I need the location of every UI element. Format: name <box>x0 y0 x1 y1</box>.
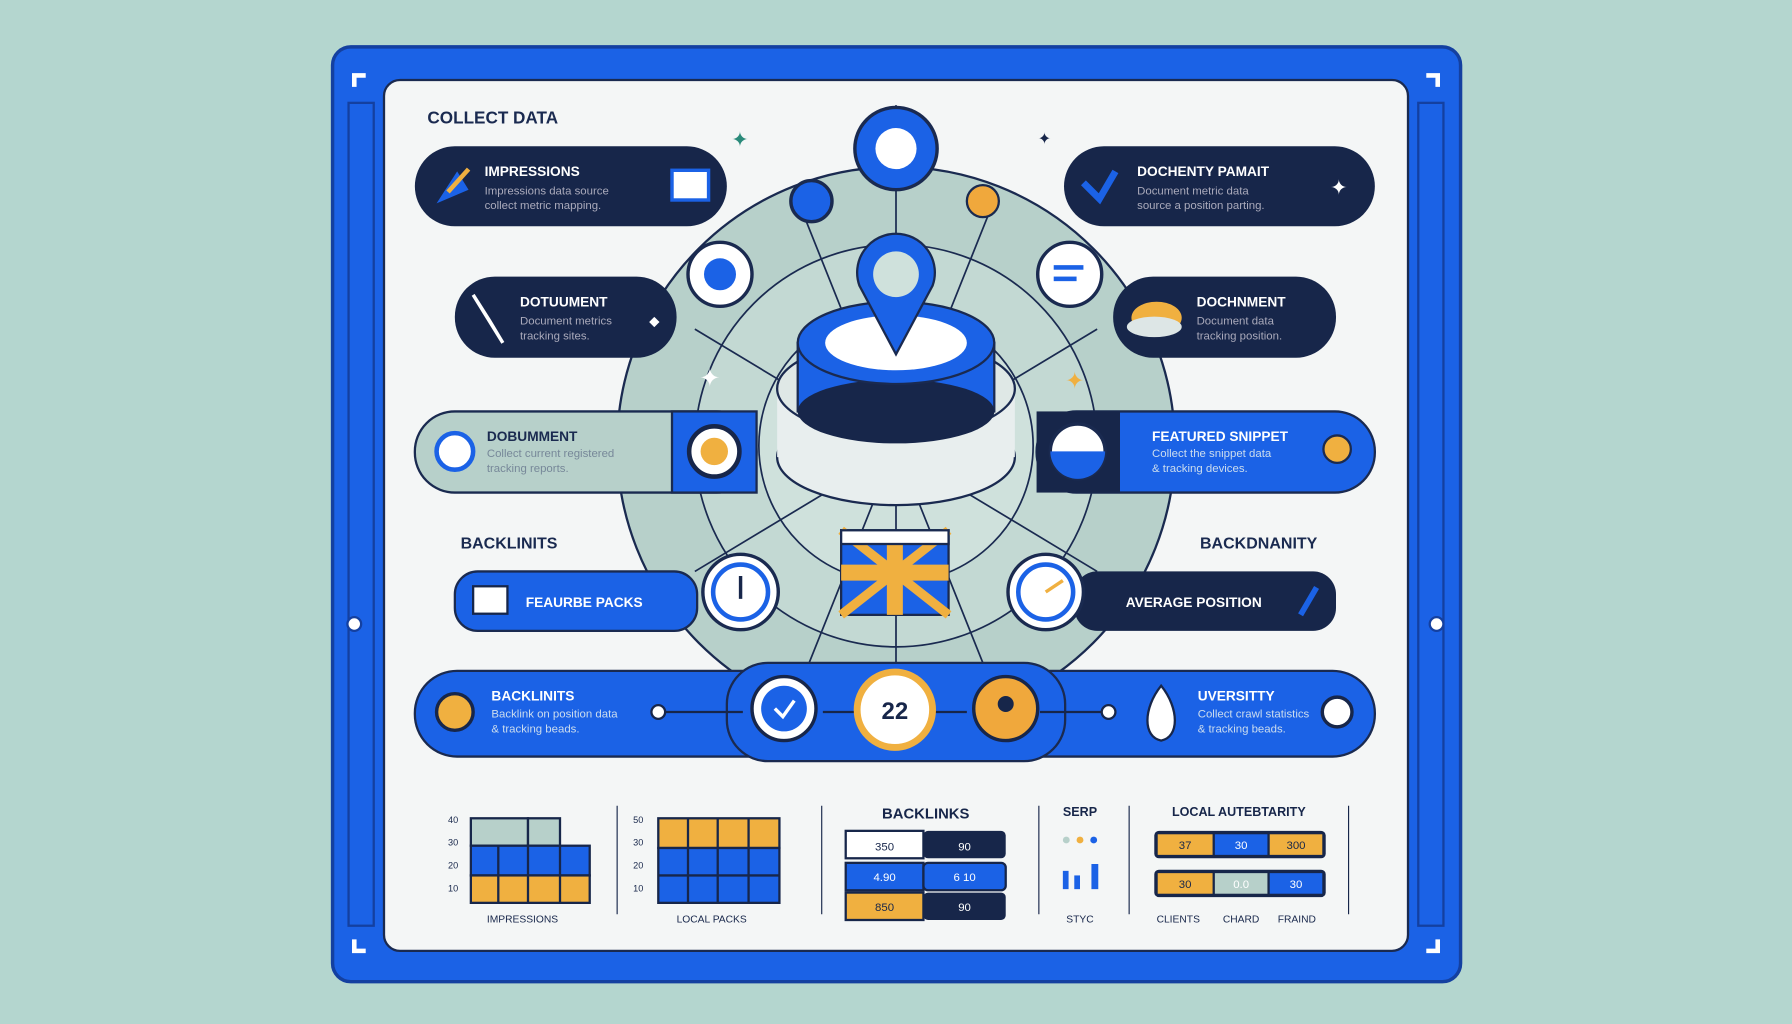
chart: local packs <box>633 815 779 925</box>
chart: local packs: 30 <box>633 838 643 848</box>
pill: featured snippet: & tracking devices. <box>1152 463 1248 475</box>
bottom bar: 22 <box>882 698 908 725</box>
chart: backlinks table <box>846 806 1006 920</box>
pill: document top right: ✦ <box>1330 176 1348 199</box>
pill: document top right: Document metric data <box>1137 185 1249 197</box>
chart: local authority: 30 <box>1179 879 1191 891</box>
pill: dochnment: Document data <box>1197 316 1275 328</box>
pill: dotuument: Document metrics <box>520 316 612 328</box>
bottom bar: Backlink on position data <box>491 709 618 721</box>
outer blue frame <box>333 47 1461 982</box>
bottom bar: & tracking beads. <box>1198 724 1286 736</box>
chart: local packs: 50 <box>633 815 643 825</box>
icon: small circles around <box>688 242 752 306</box>
icon: check <box>752 677 816 741</box>
pill: dochnment: DOCHNMENT <box>1197 294 1286 309</box>
pill: dochnment: tracking position. <box>1197 330 1282 342</box>
text: ✦ <box>1065 368 1084 394</box>
pill: document top right: DOCHENTY PAMAIT <box>1137 164 1270 179</box>
text: ✦ <box>1038 131 1051 148</box>
chart: impressions: 40 <box>448 815 458 825</box>
label: backlinits: BACKLINITS <box>461 536 558 553</box>
pill: document top right <box>1064 146 1375 226</box>
chart: local packs: 10 <box>633 883 643 893</box>
pill: dobumment grey: Collect current registered <box>487 448 614 460</box>
chart: impressions: 10 <box>448 883 458 893</box>
pill: featured snippet <box>1037 411 1375 493</box>
chart: local authority <box>1154 805 1326 925</box>
pill: featured snippet: Collect the snippet data <box>1152 448 1272 460</box>
pill: dotuument: ◆ <box>649 314 660 329</box>
bottom bar: Collect crawl statistics <box>1198 709 1310 721</box>
label: backdnanity: BACKDNANITY <box>1200 536 1318 553</box>
icon: top pin circle <box>855 107 937 190</box>
chart: local authority: CLIENTS <box>1157 914 1200 925</box>
pill: impressions <box>415 146 727 226</box>
pill: dobumment grey <box>415 411 757 493</box>
chart: local authority: 300 <box>1286 840 1306 852</box>
title: COLLECT DATA <box>427 107 558 127</box>
pill: dobumment grey: tracking reports. <box>487 463 569 475</box>
flag <box>841 530 949 615</box>
chart: local authority: 37 <box>1179 840 1191 852</box>
central platform <box>777 234 1015 505</box>
chart: backlinks table: 850 <box>875 902 894 914</box>
chart: impressions: IMPRESSIONS <box>487 914 558 925</box>
pill: dobumment grey: DOBUMMENT <box>487 429 578 444</box>
chart: local authority: 30 <box>1235 840 1247 852</box>
chart: local authority: LOCAL AUTEBTARITY <box>1172 805 1306 819</box>
chart: backlinks table: BACKLINKS <box>882 806 970 822</box>
pill: feature packs: FEAURBE PACKS <box>526 595 643 610</box>
number 22 <box>857 672 933 747</box>
pill: dotuument: tracking sites. <box>520 330 590 342</box>
pill: impressions: collect metric mapping. <box>485 200 601 212</box>
chart: backlinks table: 90 <box>958 841 971 853</box>
chart: local authority: 0.0 <box>1233 879 1249 891</box>
chart: impressions <box>448 815 590 925</box>
central radial diagram <box>617 105 1175 725</box>
chart: local packs: LOCAL PACKS <box>677 914 747 925</box>
decorative sparkles: ✦ <box>731 128 749 151</box>
pill: dotuument <box>455 277 677 358</box>
chart: impressions: 30 <box>448 838 458 848</box>
pill: impressions: Impressions data source <box>485 185 609 197</box>
bottom bar <box>415 663 1375 761</box>
chart: backlinks table: 6 10 <box>953 872 976 884</box>
chart: serp: STYC <box>1066 914 1094 925</box>
chart: serp: SERP <box>1063 805 1097 819</box>
pill: average position: AVERAGE POSITION <box>1126 595 1262 610</box>
chart: backlinks table: 350 <box>875 841 894 853</box>
pill: impressions: IMPRESSIONS <box>485 164 580 179</box>
bottom bar: & tracking beads. <box>491 724 580 736</box>
pill: featured snippet: FEATURED SNIPPET <box>1152 429 1289 444</box>
chart: backlinks table: 4.90 <box>873 872 896 884</box>
chart: serp <box>1063 805 1098 925</box>
pill: dochnment <box>1113 277 1336 358</box>
pill: average position <box>1008 554 1336 631</box>
text: ✦ <box>699 364 720 392</box>
chart: local packs: 20 <box>633 861 643 871</box>
bottom bar: BACKLINITS <box>491 689 574 704</box>
pill: document top right: source a position parting. <box>1137 200 1265 212</box>
chart: local authority: 30 <box>1290 879 1302 891</box>
chart: local authority: FRAIND <box>1278 914 1316 925</box>
chart: impressions: 20 <box>448 861 458 871</box>
bottom bar: UVERSITTY <box>1198 689 1275 704</box>
chart: local authority: CHARD <box>1223 914 1259 925</box>
pill: dotuument: DOTUUMENT <box>520 294 608 309</box>
chart: backlinks table: 90 <box>958 902 971 914</box>
icon: orange circle <box>974 677 1038 741</box>
pill: feature packs <box>455 554 778 631</box>
inner white panel <box>384 80 1408 951</box>
